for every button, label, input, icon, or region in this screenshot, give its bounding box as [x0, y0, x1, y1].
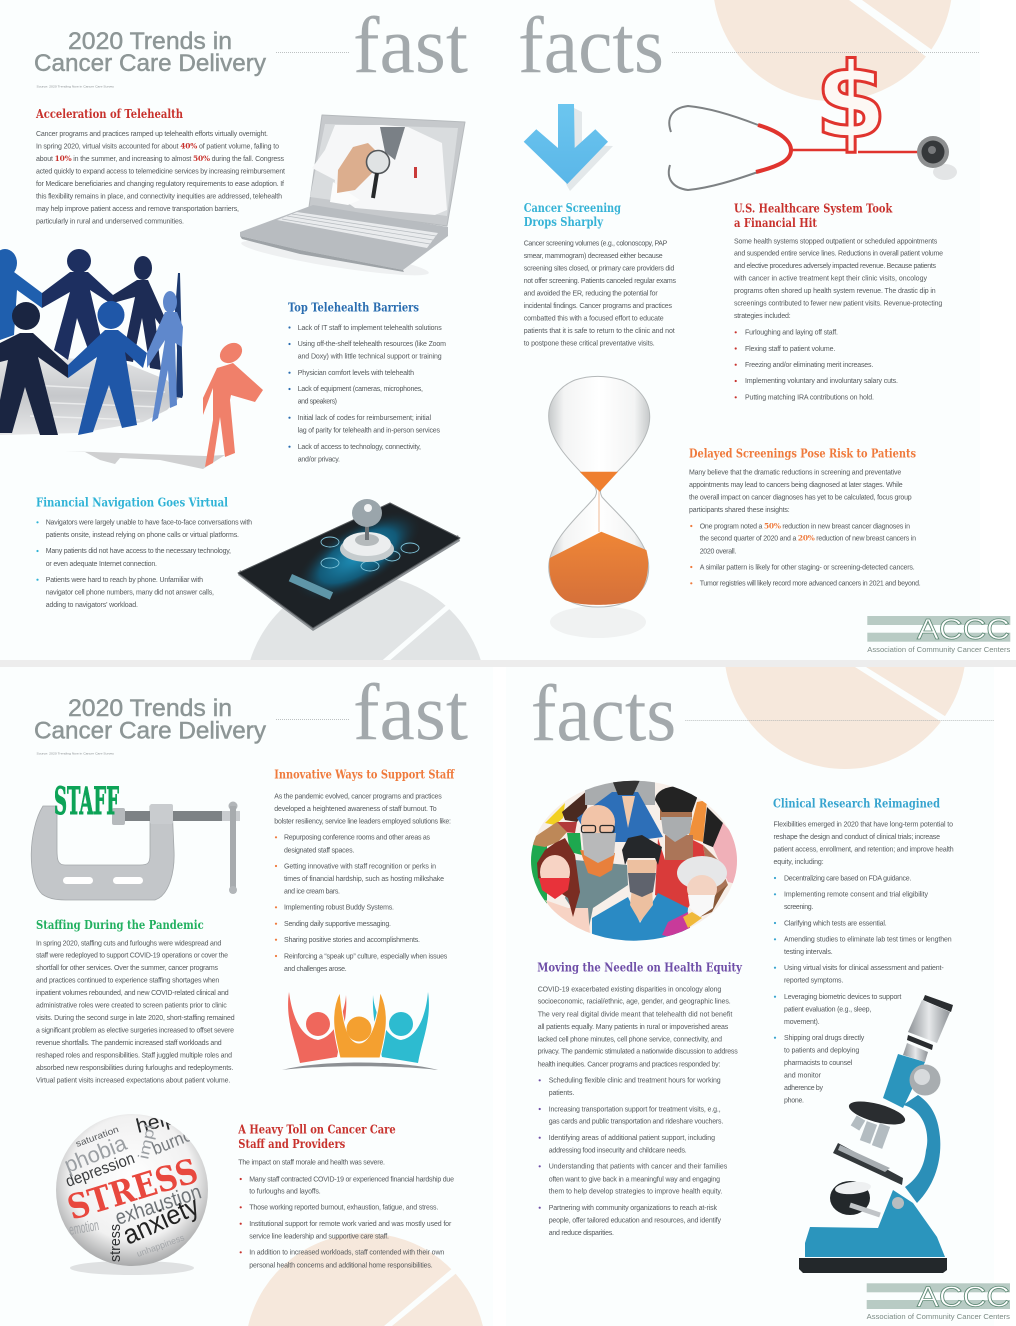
bullets: Freezing and/or eliminating merit increases. — [745, 362, 873, 369]
bullets: A similar pattern is likely for other staging- or screening-detected cancers. — [700, 564, 915, 571]
text block: Virtual patient visits increased expectations about patient volume. — [36, 1078, 230, 1085]
bullets: to patients and deploying — [784, 1048, 859, 1055]
text block — [733, 238, 943, 320]
bullets: Putting matching IRA contributions on hold. — [745, 394, 874, 402]
text block: inpatient volumes rebounded, and new COVID-related clinical and — [36, 990, 229, 997]
icon: three raised-arm figures — [282, 992, 438, 1070]
text block: and avoided the ER, reducing the potential for — [524, 290, 658, 298]
section: financial hit — [733, 201, 943, 402]
bullets: Partnering with community organizations to reach at-risk — [549, 1205, 718, 1212]
image: stress word sphere: STRESS — [63, 1151, 203, 1229]
image: stress word sphere: unhappiness — [135, 1232, 186, 1259]
bullets: or even adequate Internet connection. — [46, 561, 157, 568]
word: facts: facts — [518, 2, 664, 90]
panel: top left page — [0, 2, 486, 817]
text block: shortfall for other services. Over the summer, cancer programs — [36, 965, 218, 972]
text block: telehealth: particularly in rural and underserved communities. — [36, 218, 184, 226]
bullets: people, offer tailored education and resources, and identify — [549, 1217, 722, 1224]
bullets: Sharing positive stories and accomplishments. — [284, 937, 420, 944]
text block: staff were redeployed to support COVID-19 operations or cover the — [36, 953, 228, 960]
image: stress word sphere: burnout — [149, 1120, 207, 1159]
title: Cancer Care Delivery — [34, 50, 266, 77]
text block: telehealth: about 10% in the summer, and increasing to almost 50% during the fall. Congress — [36, 154, 284, 163]
panel: top right page — [518, 0, 1011, 654]
text block: incidental findings. Cancer programs and practices — [524, 303, 672, 310]
heading: Cancer Screening — [524, 200, 621, 215]
bullets: movement). — [784, 1019, 820, 1026]
bullets — [690, 521, 921, 588]
title: 2020 Trends in — [68, 28, 232, 55]
text block: to postpone these critical preventative visits. — [524, 340, 655, 348]
text block: telehealth: may help improve patient access and remove transportation barriers, — [36, 206, 239, 213]
text block: and suspended entire service lines. Reductions in overall patient volume — [734, 251, 943, 258]
text block: telehealth — [36, 131, 285, 226]
text block: equity, including: — [774, 859, 824, 866]
bullets: Identifying areas of additional patient support, including — [549, 1135, 715, 1142]
logo: ACCC bottom: Association of Community Cancer Centers — [867, 1312, 1010, 1321]
text block: telehealth: this flexibility remains in place, and connectivity inequities are addressed, telehealth — [36, 194, 282, 200]
title — [34, 695, 266, 744]
heading — [524, 200, 621, 229]
bullets: and Doxy) with little technical support or training — [298, 354, 442, 360]
text block — [274, 793, 451, 825]
bullets: Increasing transportation support for treatment visits, e.g., — [549, 1106, 721, 1113]
bullets: Leveraging biometric devices to support — [784, 994, 901, 1001]
source note: Source: 2020 Trending Now in Cancer Care Survey — [36, 84, 115, 88]
icon: stethoscope with dollar sign — [669, 40, 957, 190]
text block: Flexibilities emerged in 2020 that have long-term potential to — [774, 821, 953, 828]
bullets: Lack of equipment (cameras, microphones, — [298, 386, 423, 393]
bullets: times of financial hardship, such as hosting milkshake — [284, 876, 444, 883]
bullets — [774, 875, 952, 1105]
decorative peach circle — [726, 667, 964, 769]
bullets: reported symptoms. — [784, 978, 843, 985]
text block: combatted this with a focused effort to educate — [524, 316, 664, 322]
bullets: Clarifying which tests are essential. — [784, 920, 887, 927]
bullets — [539, 1078, 728, 1237]
logo: ACCC top: Association of Community Cancer Centers — [867, 645, 1011, 654]
bullets: and/or privacy. — [298, 456, 340, 464]
text block: The very real digital divide meant that telehealth did not benefit — [538, 1011, 732, 1018]
source note: Source: 2020 Trending Now in Cancer Care Survey — [36, 752, 115, 756]
bullets: them to help develop strategies to improve health equity. — [549, 1189, 722, 1196]
image: hourglass — [549, 376, 650, 638]
bullets: Repurposing conference rooms and other areas as — [284, 835, 430, 842]
bullets: testing intervals. — [784, 949, 833, 956]
panel: bottom left page — [31, 669, 483, 1326]
section: clinical research — [773, 795, 954, 1105]
text block — [36, 940, 235, 1085]
text block: patient access, enrollment, and retention; and improve health — [774, 846, 954, 853]
bullets: Physician comfort levels with telehealth — [298, 370, 414, 377]
text block: and elective procedures adversely impacted revenue. Because patients — [734, 263, 936, 270]
bullets — [735, 330, 898, 402]
text block: Some health systems stopped outpatient or scheduled appointments — [734, 238, 938, 245]
title — [34, 28, 266, 77]
image: stress word sphere — [56, 1107, 208, 1275]
image: stress word sphere: exhaustion — [112, 1180, 204, 1230]
bullets: screening. — [784, 904, 813, 911]
heading: Financial Navigation Goes Virtual — [36, 495, 228, 510]
image: stress word sphere: phobia — [61, 1130, 131, 1178]
text block: with cancer in active treatment kept their clinic visits, oncology — [733, 276, 928, 282]
icon: stethoscope with dollar sign: $ — [815, 40, 887, 162]
bullets: 2020 overall. — [700, 548, 736, 555]
text block: reshaped roles and responsibilities. Staff juggled multiple roles and — [36, 1053, 232, 1060]
bullets: the second quarter of 2020 and a 20% reduction of new breast cancers in — [700, 534, 916, 543]
logo: ACCC bottom — [867, 1282, 1010, 1321]
logo: ACCC top — [867, 614, 1011, 654]
heading: U.S. Healthcare System Took — [734, 201, 893, 216]
text block: revenue shortfalls. The pandemic increased staff workloads and — [36, 1040, 222, 1047]
section: health equity — [537, 960, 743, 1237]
text block: screenings contributed to fewer new patient visits. Revenue-protecting — [734, 300, 942, 308]
heading: Drops Sharply — [524, 214, 604, 229]
bullets: gas cards and public transportation and rideshare vouchers. — [549, 1119, 723, 1126]
decorative peach circle — [714, 0, 951, 101]
text block: lacked cell phone minutes, cell phone service, connectivity, and — [538, 1036, 722, 1043]
decorative peach circle — [248, 1233, 483, 1326]
word: facts: facts — [531, 670, 676, 758]
text block: telehealth: acted quickly to expand access to telemedicine services by increasing reimbursement — [36, 168, 285, 176]
decorative grey circle — [250, 580, 480, 660]
bullets: Shipping oral drugs directly — [784, 1035, 865, 1042]
text block: the overall impact on cancer diagnoses has yet to be calculated, focus group — [689, 494, 912, 502]
icon: blue down arrow — [524, 104, 613, 191]
image: stress word sphere: anxiety — [118, 1190, 204, 1250]
text block: visits. During the second surge in late 2020, short-staffing remained — [36, 1015, 235, 1022]
bullets: Those working reported burnout, exhaustion, fatigue, and stress. — [249, 1205, 438, 1212]
image: clamp squeezing staff: STAFF — [54, 779, 119, 823]
text block: socioeconomic, racial/ethnic, age, gender, and geographic lines. — [538, 999, 731, 1006]
text block: and practices continued to experience staffing shortages when — [36, 978, 219, 985]
text block: administrative roles were created to screen patients prior to clinic — [36, 1003, 227, 1010]
panel: bottom right page — [531, 667, 1010, 1321]
bullets: Furloughing and laying off staff. — [745, 330, 838, 336]
bullets: adding to navigators' workload. — [46, 602, 138, 609]
bullets — [36, 520, 252, 609]
image: blue microscope — [799, 995, 953, 1273]
text block: appointments may lead to cancers being diagnosed at later stages. While — [689, 482, 903, 489]
bullets: Amending studies to eliminate lab test times or lengthen — [784, 937, 952, 944]
text block: As the pandemic evolved, cancer programs and practices — [274, 793, 442, 800]
bullets: Many patients did not have access to the necessary technology, — [46, 548, 231, 555]
bullets: Lack of IT staff to implement telehealth solutions — [298, 325, 442, 332]
text block — [524, 240, 676, 348]
bullets: phone. — [784, 1098, 804, 1105]
section: financial navigation — [36, 495, 252, 609]
bullets: Implementing robust Buddy Systems. — [284, 905, 394, 912]
bullets: Sending daily supportive messaging. — [284, 921, 391, 928]
bullets: navigator cell phone numbers, many did not answer calls, — [46, 590, 214, 596]
bullets: Understanding that patients with cancer and their families — [549, 1164, 728, 1171]
bullets: addressing food insecurity and childcare needs. — [549, 1147, 687, 1154]
text block — [689, 470, 912, 514]
bullets: and reduce disparities. — [549, 1230, 614, 1237]
section: cancer screening — [524, 200, 676, 348]
section: heavy toll — [238, 1122, 454, 1269]
bullets: Institutional support for remote work varied and was mostly used for — [249, 1221, 452, 1228]
text block: all patients equally. Many patients in rural or impoverished areas — [538, 1024, 729, 1031]
text block: Many believe that the dramatic reductions in screening and preventative — [689, 470, 901, 477]
bullets: In addition to increased workloads, staff contended with their own — [249, 1250, 444, 1257]
section: staffing during the pandemic — [36, 917, 235, 1085]
text block: telehealth: Cancer programs and practices ramped up telehealth efforts virtually overnight. — [36, 131, 268, 138]
bullets: patient evaluation (e.g., sleep, — [784, 1006, 871, 1013]
heading: Staff and Providers — [238, 1136, 345, 1151]
image: stress word sphere: stress — [107, 1224, 124, 1262]
bullets — [275, 835, 448, 973]
bullets: Initial lack of codes for reimbursement; initial — [298, 415, 431, 422]
text block: smear, mammogram) decreased either because — [524, 253, 663, 260]
heading: Moving the Needle on Health Equity — [537, 960, 743, 975]
section: delayed screenings — [689, 445, 921, 588]
bullets: and monitor — [784, 1073, 822, 1080]
bullets: Using off-the-shelf telehealth resources (like Zoom — [298, 341, 446, 348]
bullets: and challenges arose. — [284, 966, 347, 973]
section: innovative ways — [274, 767, 455, 973]
image: stress word sphere: depression — [64, 1150, 137, 1191]
text block: Cancer screening volumes (e.g., colonoscopy, PAP — [524, 240, 668, 248]
bullets: pharmacists to counsel — [784, 1060, 853, 1067]
text block — [774, 821, 954, 866]
bullets: Getting innovative with staff recognition or perks in — [284, 863, 436, 870]
image: smartphone with key — [238, 493, 460, 631]
text block: patients that it is safe to return to the clinic and not — [524, 328, 675, 335]
heading: a Financial Hit — [734, 215, 817, 230]
image: stress word sphere: help — [134, 1107, 178, 1138]
heading — [734, 201, 893, 230]
image: stress word sphere: emotion — [68, 1217, 100, 1239]
text block: strategies included: — [734, 313, 791, 320]
bullets: Patients were hard to reach by phone. Unfamiliar with — [46, 577, 203, 584]
bullets: lag of parity for telehealth and in-person services — [298, 428, 440, 434]
text block: reshape the design and conduct of clinical trials; increase — [774, 834, 940, 841]
text block: developed a heightened awareness of staff burnout. To — [274, 806, 437, 813]
bullets: to furloughs and layoffs. — [249, 1189, 321, 1196]
title: Cancer Care Delivery — [34, 717, 266, 744]
image: laptop with doctor — [240, 115, 465, 282]
text block: In spring 2020, staffing cuts and furloughs were widespread and — [36, 940, 221, 947]
text block: participants shared these insights: — [689, 507, 790, 514]
word: fast: fast — [353, 2, 468, 90]
bullets: designated staff spaces. — [284, 847, 354, 854]
text block: COVID-19 exacerbated existing disparities in oncology along — [538, 986, 721, 993]
bullets: and speakers) — [298, 398, 337, 406]
heading: A Heavy Toll on Cancer Care — [238, 1122, 396, 1137]
text block: a significant problem as elective surgeries increased to offset severe — [36, 1028, 234, 1035]
bullets: Reinforcing a “speak up” culture, especially when issues — [284, 953, 448, 960]
bullets: Navigators were largely unable to have face-to-face conversations with — [46, 520, 252, 526]
heading: Top Telehealth Barriers — [288, 300, 419, 314]
text block — [538, 986, 738, 1068]
image: stress word sphere: saturation — [74, 1124, 120, 1149]
heading — [238, 1122, 396, 1151]
text block: programs often shored up health system revenue. The drastic dip in — [734, 288, 936, 295]
bullets: Tumor registries will likely record more advanced cancers in 2021 and beyond. — [700, 581, 921, 588]
title: 2020 Trends in — [68, 695, 232, 722]
bullets: patients. — [549, 1090, 574, 1097]
text block: telehealth: In spring 2020, virtual visits accounted for about 40% of patient volume, falling to — [36, 142, 279, 150]
bullets — [288, 325, 446, 464]
text block: absorbed new responsibilities during furloughs and redeployments. — [36, 1065, 233, 1072]
heading: Staffing During the Pandemic — [36, 917, 204, 932]
bullets: and ice cream bars. — [284, 888, 340, 895]
image: stress word sphere: impl — [135, 1123, 159, 1161]
bullets: One program noted a 50% reduction in new breast cancer diagnoses in — [700, 521, 910, 530]
bullets: Lack of access to technology, connectivity, — [298, 444, 421, 451]
text block: screening sites closed, or primary care providers did — [524, 266, 674, 272]
word: fast: fast — [353, 669, 468, 757]
heading: Delayed Screenings Pose Risk to Patients — [689, 445, 916, 460]
text block: telehealth: for Medicare beneficiaries and changing regulatory requirements to ease adoption. If — [36, 181, 284, 188]
section: top telehealth barriers — [288, 300, 446, 464]
text block: bolster resiliency, service line leaders employed solutions like: — [274, 818, 451, 825]
bullets: Flexing staff to patient volume. — [745, 346, 835, 353]
image: masked crowd — [531, 780, 740, 945]
text block: not offer screening. Patients canceled regular exams — [524, 278, 676, 285]
bullets: Scheduling flexible clinic and treatment hours for working — [549, 1078, 721, 1085]
heading: Clinical Research Reimagined — [773, 795, 940, 810]
heading: Innovative Ways to Support Staff — [274, 767, 455, 782]
logo: ACCC top: ACCC — [917, 614, 1010, 646]
image: clamp squeezing staff — [31, 779, 240, 900]
text block: health inequities. Cancer programs and practices responded by: — [538, 1061, 720, 1068]
bullets: Implementing voluntary and involuntary salary cuts. — [745, 378, 898, 385]
bullets: adherence by — [784, 1085, 824, 1092]
bullets: Decentralizing care based on FDA guidance. — [784, 875, 911, 882]
text block: The impact on staff morale and health was severe. — [238, 1160, 385, 1167]
heading: acceleration of telehealth: Acceleration of Telehealth — [35, 106, 183, 121]
text block: privacy. The pandemic stimulated a nationwide discussion to address — [538, 1049, 738, 1056]
bullets: Using virtual visits for clinical assessment and patient- — [784, 965, 944, 972]
image: paper people circle — [0, 249, 263, 469]
bullets: personal health concerns and additional home responsibilities. — [249, 1262, 433, 1269]
logo: ACCC bottom: ACCC — [917, 1282, 1010, 1314]
bullets: often want to give back in a meaningful way and engaging — [549, 1176, 720, 1183]
bullets: patients onsite, instead relying on phone calls or virtual platforms. — [46, 532, 239, 539]
bullets: service line leadership and supportive care staff. — [249, 1234, 389, 1241]
bullets — [240, 1176, 454, 1269]
bullets: Many staff contracted COVID-19 or experienced financial hardship due — [249, 1176, 454, 1183]
bullets: Implementing remote consent and trial eligibility — [784, 892, 928, 899]
